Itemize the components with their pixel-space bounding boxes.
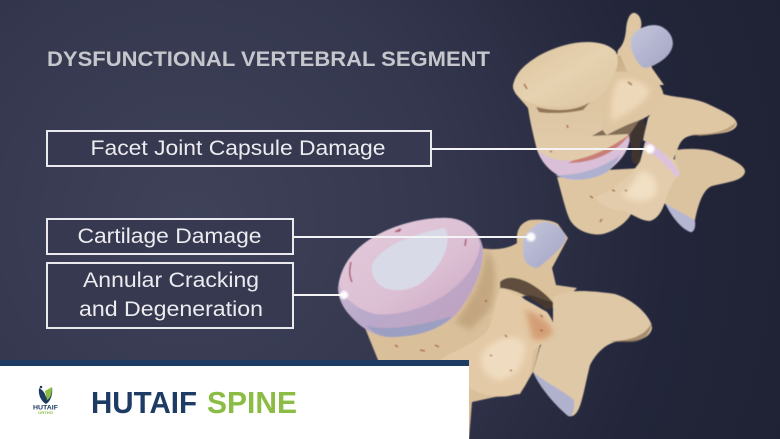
callout: cartilage damage: [47, 219, 537, 254]
lower vertebra: boss highlight: [481, 338, 525, 380]
upper vertebra: body side: [515, 55, 645, 161]
lower vertebra: central boss: [440, 288, 554, 397]
illustration: lower vertebra: [338, 218, 652, 439]
upper vertebra: inner red disc area: [568, 134, 630, 163]
leader line: [294, 294, 344, 296]
callout: facet joint capsule damage: [47, 131, 656, 166]
label box: [47, 263, 293, 328]
upper vertebra: shadow under endplate: [536, 102, 590, 113]
logo mark: [39, 386, 52, 404]
leader line: [431, 148, 650, 150]
lower vertebra: transverse underside shade: [610, 322, 652, 342]
leader dot: [338, 290, 350, 300]
label text: Cartilage Damage: [78, 224, 262, 248]
illustration: upper vertebral segment: [513, 13, 745, 234]
brand name accent: SPINE: [207, 385, 297, 420]
lower vertebra: grey facet bottom: [533, 372, 574, 416]
label text line 1: Annular Cracking: [83, 268, 259, 292]
lower vertebra: speckles: [395, 300, 543, 371]
upper vertebra: disc: [537, 134, 630, 180]
lower vertebra: disc rim: [338, 218, 483, 337]
lower vertebra: boss ruddy tip: [525, 310, 553, 340]
leader dot: [644, 143, 656, 155]
lower vertebra: pedicle stalk: [470, 220, 577, 320]
lower vertebra: recess shadow: [500, 278, 556, 310]
lower vertebra: disc top surface: [339, 218, 480, 314]
upper vertebra: lower articular process: [595, 142, 680, 221]
upper vertebra: top endplate: [513, 42, 618, 106]
label box: [47, 219, 293, 254]
lower vertebra: transverse process: [533, 291, 652, 416]
title: DYSFUNCTIONAL VERTEBRAL SEGMENT: [47, 48, 490, 71]
footer panel: white: [0, 366, 469, 439]
upper vertebra: grey cartilage facet: [631, 25, 673, 68]
lower vertebra: main bone: [365, 250, 553, 439]
lower vertebra: nucleus: [372, 228, 448, 290]
label text line 2: and Degeneration: [79, 297, 263, 321]
upper vertebra: capsule tissue: [646, 141, 680, 178]
upper vertebra: articular stalk: [614, 13, 664, 85]
callout: annular cracking and degeneration: [47, 263, 350, 328]
upper vertebra: lower grey facet: [665, 203, 695, 232]
upper vertebra: transverse underside shade: [690, 122, 736, 136]
upper vertebra: recess shadow: [592, 112, 646, 164]
upper vertebra: lower transverse process: [664, 149, 745, 226]
leader line: [294, 236, 530, 238]
upper vertebra: process highlight: [622, 172, 656, 201]
upper vertebra: speckles: [524, 82, 632, 222]
label text: Facet Joint Capsule Damage: [90, 136, 386, 160]
upper vertebra: boss highlight: [611, 79, 650, 122]
label box: [47, 131, 431, 166]
leader dot: [525, 231, 537, 243]
upper vertebra: upper transverse process and pillar: [643, 94, 737, 160]
upper vertebra: disc blue edge: [555, 155, 620, 180]
header bar: navy strip: [0, 360, 469, 366]
upper vertebra: lower body: [557, 168, 642, 234]
logo subword: ORTHO: [38, 410, 53, 415]
logo wordmark: HUTAIF: [33, 406, 58, 412]
lower vertebra: annular cracks: [350, 229, 466, 282]
lower vertebra: grey cartilage facet: [523, 222, 566, 268]
lower vertebra: disc bottom edge: [366, 316, 452, 337]
brand name: HUTAIF: [91, 385, 197, 420]
upper vertebra: central boss: [596, 72, 664, 135]
lower vertebra: shade by disc: [455, 248, 495, 330]
logo: Hutaif Ortho: [33, 386, 58, 415]
